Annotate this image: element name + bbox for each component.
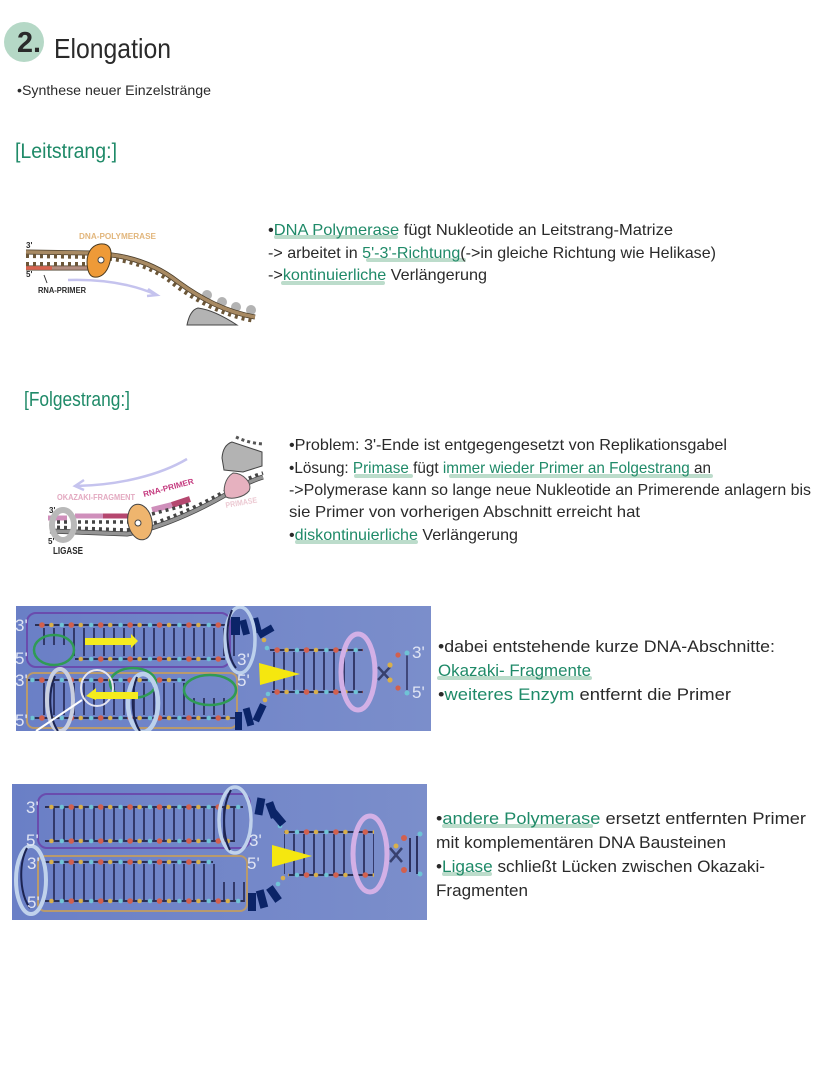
- illustration: leading strand: 3': [26, 241, 32, 250]
- highlight: polymerase rings: [36, 607, 375, 732]
- text block: Okazaki fragments: [438, 637, 775, 704]
- text block: lagging strand: •Problem: 3'-Ende ist entgegengesetzt von Replikationsgabel: [289, 437, 727, 454]
- text block: lagging strand: [289, 437, 811, 544]
- icon: DNA polymerase: [87, 244, 111, 277]
- label: RNA-Primer: RNA-PRIMER: [38, 286, 86, 295]
- icon: helicase rock: [222, 442, 262, 472]
- labels: strand ends: 3': [27, 854, 40, 873]
- highlight: rings: [16, 787, 387, 914]
- label: Primase: PRIMASE: [225, 495, 258, 510]
- text block: leading strand: ->kontinuierliche Verlängerung: [268, 267, 487, 284]
- text block: lagging strand: •diskontinuierliche Verlängerung: [289, 527, 518, 544]
- text block: Okazaki fragments: •weiteres Enzym entfernt die Primer: [438, 685, 731, 704]
- lagging strand: [48, 473, 263, 534]
- arrow: synthesis direction: [68, 280, 157, 296]
- arrow: helicase direction: [259, 663, 300, 685]
- illustration: lagging strand: [48, 437, 263, 557]
- text block: polymerase and ligase: mit komplementären DNA Bausteinen: [436, 833, 726, 852]
- heading: Leitstrang: [Leitstrang:]: [15, 140, 117, 163]
- illustration: leading strand: 5': [26, 270, 32, 279]
- text block: lagging strand: sie Primer von vorherigen Abschnitt erreicht hat: [289, 504, 641, 521]
- labels: strand ends: [15, 616, 425, 730]
- icon: primase: [224, 473, 250, 498]
- labels: strand ends: 3': [15, 616, 28, 635]
- text block: leading strand: •DNA Polymerase fügt Nukleotide an Leitstrang-Matrize: [268, 222, 673, 239]
- labels: strand ends: 5': [26, 831, 39, 850]
- labels: strand ends: 5': [247, 854, 260, 873]
- text block: lagging strand: •Lösung: Primase fügt immer wieder Primer an Folgestrang an: [289, 460, 711, 477]
- labels: strand ends: 5': [15, 711, 28, 730]
- illustration: lagging strand: 3': [49, 506, 55, 515]
- fork: [276, 824, 422, 886]
- labels: strand ends: 5': [237, 671, 250, 690]
- labels: strand ends: 3': [249, 831, 262, 850]
- text block: Okazaki fragments: •dabei entstehende kurze DNA-Abschnitte:: [438, 637, 775, 656]
- text block: leading strand: [268, 222, 716, 284]
- fork: [262, 638, 410, 702]
- intro text: •Synthese neuer Einzelstränge: [17, 82, 211, 98]
- text block: polymerase and ligase: •andere Polymerase ersetzt entfernten Primer: [436, 809, 806, 828]
- label: Ligase: LIGASE: [53, 546, 83, 557]
- labels: strand ends: [26, 798, 262, 912]
- lower strand: [38, 856, 247, 911]
- labels: strand ends: 3': [412, 643, 425, 662]
- icon: step number badge: 2.: [17, 27, 41, 59]
- labels: strand ends: 5': [412, 683, 425, 702]
- labels: strand ends: 3': [237, 650, 250, 669]
- icon: polymerase: [125, 502, 155, 542]
- label: Okazaki-Fragment: OKAZAKI-FRAGMENT: [57, 493, 135, 502]
- text block: Okazaki fragments: Okazaki- Fragmente: [438, 661, 591, 680]
- label: DNA-Polymerase: DNA-POLYMERASE: [79, 232, 157, 241]
- template strand: [26, 252, 255, 321]
- icon: ligase: [52, 510, 74, 540]
- text block: leading strand: -> arbeitet in 5'-3'-Richtung(->in gleiche Richtung wie Helikase): [268, 245, 716, 262]
- label: RNA-Primer: RNA-PRIMER: [142, 477, 195, 499]
- labels: strand ends: 3': [15, 671, 28, 690]
- title: Elongation: [54, 33, 171, 64]
- arrow: synthesis direction: [75, 459, 187, 490]
- upper strand: [38, 794, 250, 848]
- diagram: replication fork with Okazaki fragments: [15, 606, 431, 732]
- dark base pairs at fork: [248, 797, 286, 911]
- icon: helicase rock: [187, 308, 237, 325]
- upper strand: [27, 613, 240, 667]
- text block: lagging strand: ->Polymerase kann so lange neue Nukleotide an Primerende anlagern bis: [289, 482, 811, 499]
- arrow: lower yellow: [86, 688, 138, 700]
- icon: step number badge: [4, 22, 44, 62]
- labels: strand ends: 5': [27, 893, 40, 912]
- text block: polymerase and ligase: [436, 809, 806, 900]
- highlight: primer ovals: [34, 635, 236, 705]
- labels: strand ends: 3': [26, 798, 39, 817]
- arrow: helicase direction: [272, 845, 312, 867]
- text block: polymerase and ligase: Fragmenten: [436, 881, 528, 900]
- lower strand: [27, 673, 237, 728]
- arrow: upper yellow: [85, 634, 138, 648]
- illustration: leading strand: [26, 232, 256, 325]
- illustration: lagging strand: 5': [48, 537, 54, 546]
- text block: polymerase and ligase: •Ligase schließt Lücken zwischen Okazaki-: [436, 857, 765, 876]
- dark base pairs at fork: [231, 617, 274, 730]
- labels: strand ends: 5': [15, 649, 28, 668]
- diagram: replication fork after primer replacement: [12, 784, 427, 920]
- heading: Folgestrang: [Folgestrang:]: [24, 389, 130, 411]
